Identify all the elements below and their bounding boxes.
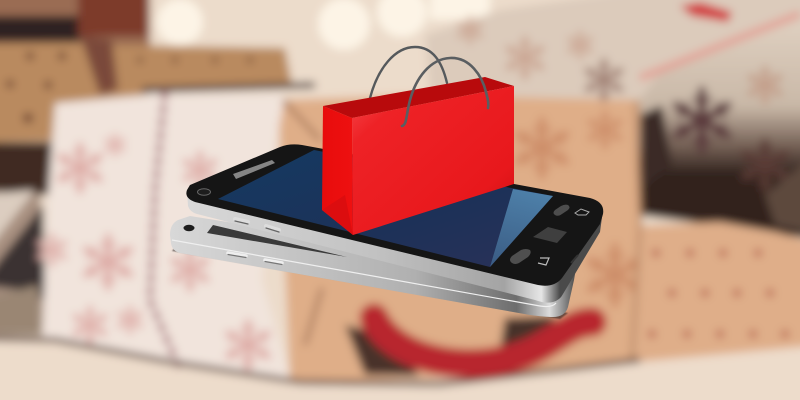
dark left lower region — [0, 142, 60, 335]
bag front panel — [352, 86, 514, 235]
lower phone screen edge — [207, 225, 347, 257]
front camera — [198, 189, 210, 195]
shopping bag — [322, 47, 514, 235]
center box snowflakes — [518, 112, 640, 304]
tan gift left — [0, 35, 292, 142]
bag side panel — [322, 106, 353, 235]
top right gift — [425, 0, 800, 110]
lower phone shadow — [172, 246, 568, 319]
box fold detail — [283, 100, 322, 345]
right dark gift — [640, 14, 800, 240]
orange center box — [278, 95, 640, 382]
upper phone side buttons — [235, 219, 248, 222]
lower phone bevel — [172, 240, 556, 307]
home icon — [575, 209, 589, 215]
lower phone buttons — [228, 253, 246, 256]
upper phone — [186, 144, 603, 303]
back key — [510, 249, 531, 264]
bag side fold — [322, 195, 353, 235]
side port — [571, 255, 578, 263]
return icon — [538, 258, 549, 265]
top-left dark gift — [0, 0, 150, 50]
bag interior — [323, 77, 514, 118]
dark box floor edge — [0, 338, 640, 384]
upper phone black face — [186, 144, 603, 286]
right lower polka-dot box — [636, 222, 800, 362]
bokeh lights — [157, 0, 490, 50]
home key — [533, 227, 567, 243]
front handle — [402, 58, 488, 126]
back handle — [370, 47, 447, 98]
floor — [0, 338, 800, 400]
lower phone body — [170, 216, 577, 317]
upper phone side — [187, 190, 603, 303]
speaker grille — [233, 160, 275, 179]
menu key — [554, 205, 570, 216]
white snowflake gift — [39, 85, 315, 378]
upper phone screen — [218, 150, 553, 267]
lower phone camera — [184, 225, 194, 231]
lower phone — [170, 216, 577, 319]
screen glare — [490, 189, 553, 267]
rocking horse — [345, 316, 592, 376]
